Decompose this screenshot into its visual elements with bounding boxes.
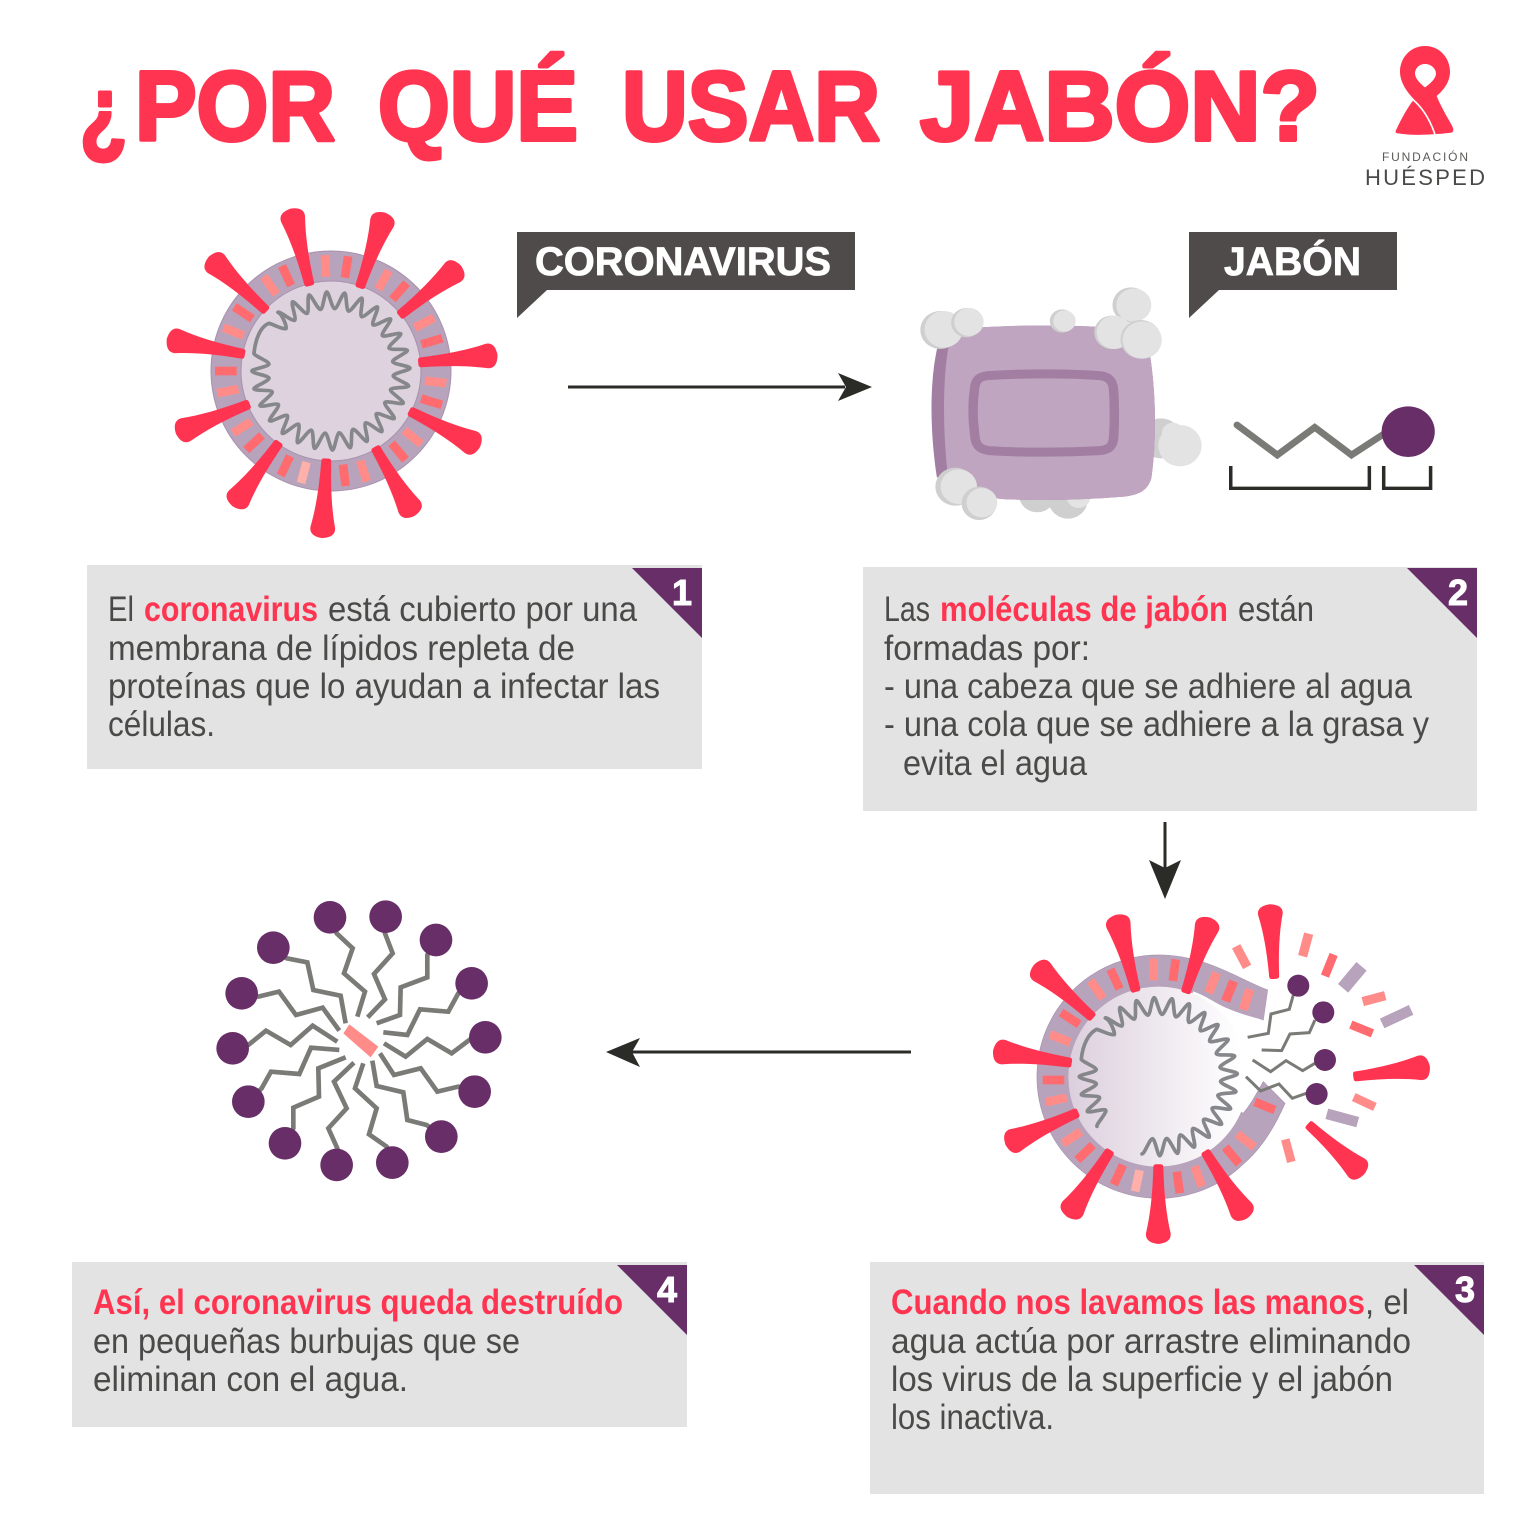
title: QUÉ [378,51,578,161]
panel 2 text: Las [884,590,930,629]
label: jabón [1189,232,1397,318]
detached spikes [1257,903,1432,1184]
icon: coronavirus [164,206,499,539]
arrow: broken virus to micelle [606,1038,911,1067]
panel 3: lavado de manos [870,1262,1484,1494]
panel 2 text: formadas por: [884,629,1090,668]
icon: ribbon [1396,46,1453,137]
molecule tail [1237,425,1385,455]
title: ¿ [80,56,127,166]
virus interior [1068,987,1248,1167]
panel 1 text: está cubierto por una [328,590,638,629]
micelle tails [233,917,485,1165]
panel 3 text: , el [1365,1283,1409,1322]
panel 3 text: Cuando nos lavamos las manos [891,1283,1365,1322]
logo: Fundación Huésped: HUÉSPED [1365,165,1485,190]
soap molecules attacking [1246,975,1336,1105]
soap inset frame [973,374,1114,452]
icon: soap bar [920,287,1202,520]
membrane proteins [1043,959,1276,1194]
number badge 3 [1414,1265,1484,1335]
molecule head [1382,406,1435,457]
number badge 2 [1407,568,1477,638]
number badge 3: 3 [1455,1269,1475,1310]
panel 2 text: evita el agua [903,744,1087,783]
arrow: soap to broken virus [1149,822,1181,899]
panel 3 text: los inactiva. [891,1398,1054,1437]
panel 1 text: membrana de lípidos repleta de [108,629,575,668]
panel 2 text: moléculas de jabón [940,590,1228,629]
panel 2 text [884,590,1429,783]
attached spikes [991,912,1257,1244]
RNA strand fragments [1077,996,1239,1158]
panel 1 text: células. [108,705,215,744]
panel 1 text [108,590,660,744]
title: POR [135,51,335,161]
number badge 1: 1 [672,572,692,613]
panel 1: coronavirus [87,565,702,769]
panel 4 text [93,1283,623,1399]
foam behind the bar [1019,418,1202,519]
panel 2: jabón [863,567,1477,811]
panel 4 text: eliminan con el agua. [93,1360,408,1399]
panel 3 text: los virus de la superficie y el jabón [891,1360,1393,1399]
panel 2 text: - una cola que se adhiere a la grasa y [884,705,1429,744]
title: USAR [622,51,880,161]
label: coronavirus [517,232,855,318]
spikes [164,206,499,539]
panel 2 text: están [1238,590,1314,629]
panel 4 text: en pequeñas burbujas que se [93,1322,520,1361]
panel 4: destruido [72,1262,687,1427]
logo: Fundación Huésped [1365,46,1485,190]
soap face [944,325,1155,500]
icon: soap micelle [216,900,502,1181]
panel 1 text: coronavirus [144,590,318,629]
logo: Fundación Huésped: FUNDACIÓN [1382,149,1468,164]
virus interior [241,281,421,461]
panel 1 text: proteínas que lo ayudan a infectar las [108,667,660,706]
title [80,51,1320,166]
arrow: coronavirus to soap [568,373,872,401]
upper membrane arm [1158,955,1268,1020]
number badge 2: 2 [1448,572,1468,613]
number badge 4: 4 [657,1269,677,1310]
virus membrane [211,251,451,491]
membrane proteins [215,255,447,487]
broken membrane [1037,955,1285,1198]
soap body [932,325,1155,500]
membrane debris [1232,933,1413,1163]
panel 4 text: Así, el coronavirus queda destruído [93,1283,623,1322]
micelle heads [216,900,502,1181]
trapped virus fragment [343,1024,378,1057]
panel 3 text: agua actúa por arrastre eliminando [891,1322,1411,1361]
title: JABÓN? [920,51,1320,161]
panel 2 text: - una cabeza que se adhiere al agua [884,667,1412,706]
RNA strand [250,290,412,452]
panel 1 text: El [108,590,134,629]
foam on the bar [920,287,1162,520]
number badge 1 [632,568,702,638]
label: jabón: JABÓN [1224,238,1361,284]
head bracket [1384,466,1431,488]
icon: soap molecule [1231,406,1435,488]
panel 3 text [891,1283,1411,1437]
label: coronavirus: CORONAVIRUS [535,240,831,284]
tail bracket [1231,466,1369,488]
icon: virus broken by soap [991,903,1432,1244]
number badge 4 [617,1265,687,1335]
